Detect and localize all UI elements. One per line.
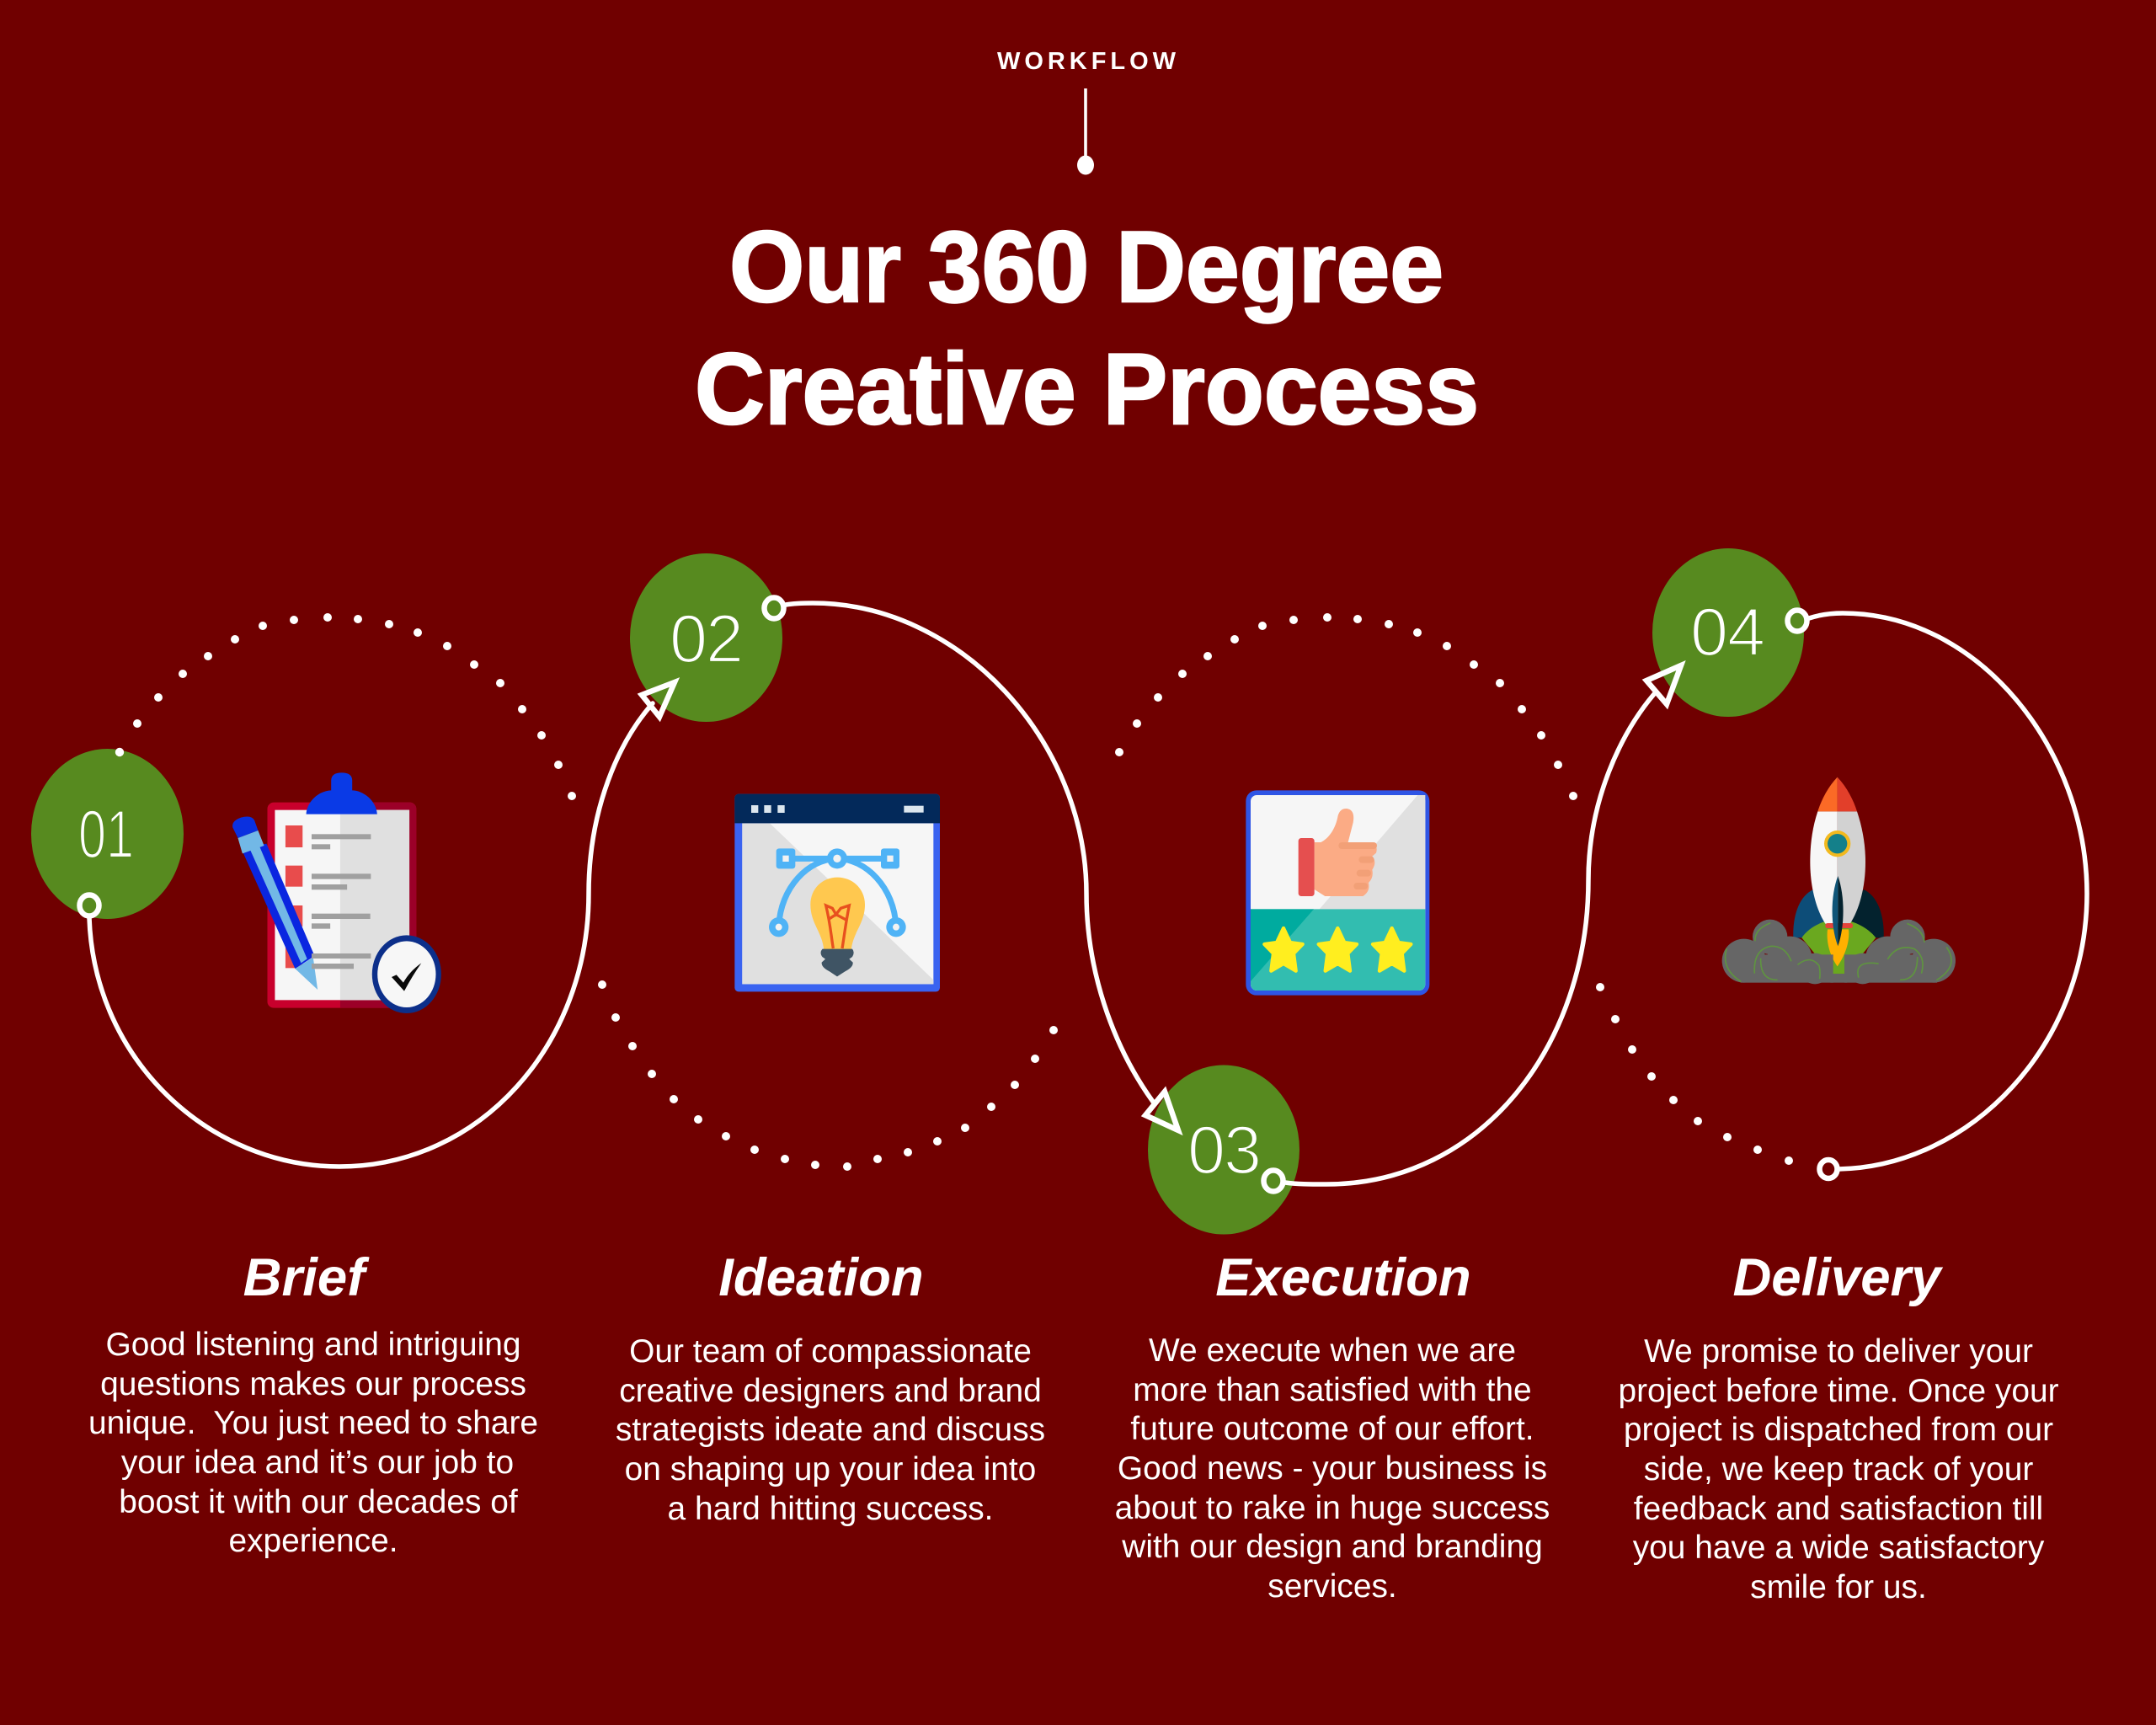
text block: Ideation — [616, 1333, 1045, 1527]
text block: Delivery: project is dispatched from our — [1624, 1412, 2053, 1448]
text block: Execution: about to rake in huge success — [1115, 1490, 1550, 1526]
text block: Ideation: a hard hitting success. — [668, 1491, 993, 1527]
text block: Delivery: feedback and satisfaction till — [1634, 1491, 2043, 1527]
text block: Brief: experience. — [228, 1523, 398, 1559]
title connector line with dot — [1077, 88, 1094, 175]
icon: thumbs up with three stars — [1246, 790, 1429, 996]
eyebrow label: WORKFLOW: WORKFLOW — [997, 48, 1177, 75]
dotted arc: bottom, step 04 — [1596, 983, 1793, 1165]
text block: Brief: your idea and it’s our job to — [121, 1445, 514, 1481]
curve with arrow: step 03 to 04 — [1263, 665, 1681, 1191]
text block: Execution: future outcome of our effort. — [1130, 1411, 1534, 1447]
dotted arc: top, step 01 — [115, 613, 576, 800]
text block: Brief: unique. You just need to share — [88, 1405, 538, 1441]
step badge 04: 04 — [1690, 595, 1765, 670]
text block: Delivery — [1618, 1333, 2059, 1605]
step badge 02 — [630, 553, 782, 722]
step badge 02: 02 — [670, 601, 744, 677]
title: Our 360 Degree — [729, 211, 1444, 323]
icon: rocket launching from smoke — [1722, 777, 1956, 984]
text block: Delivery: smile for us. — [1750, 1569, 1927, 1605]
heading: Ideation: Ideation — [718, 1248, 924, 1307]
step badge 01 — [31, 749, 184, 919]
step badge 01: 01 — [78, 797, 134, 873]
dotted arc: bottom, step 02 — [598, 980, 1058, 1171]
heading: Delivery: Delivery — [1732, 1248, 1943, 1307]
text block: Ideation: on shaping up your idea into — [625, 1451, 1036, 1487]
text block: Execution: We execute when we are — [1149, 1332, 1516, 1369]
text block: Execution: with our design and branding — [1121, 1529, 1543, 1565]
text block: Brief — [88, 1327, 538, 1559]
heading: Brief: Brief — [243, 1248, 370, 1307]
text block: Delivery: project before time. Once your — [1618, 1373, 2059, 1409]
step badge 03 — [1148, 1065, 1299, 1235]
heading: Execution: Execution — [1215, 1248, 1471, 1307]
text block: Ideation: Our team of compassionate — [629, 1333, 1032, 1370]
text block: Brief: questions makes our process — [100, 1366, 526, 1402]
icon: browser window with bulb and bezier curve — [734, 794, 940, 991]
text block: Brief: Good listening and intriguing — [106, 1327, 520, 1363]
curve with arrow: step 01 to 02 — [79, 682, 675, 1167]
text block: Execution — [1115, 1332, 1550, 1605]
text block: Ideation: creative designers and brand — [619, 1373, 1042, 1409]
text block: Delivery: you have a wide satisfactory — [1633, 1530, 2045, 1566]
title — [695, 211, 1479, 446]
icon: clipboard with pencil and check badge — [232, 772, 441, 1013]
text block: Brief: boost it with our decades of — [119, 1484, 518, 1520]
text block: Ideation: strategists ideate and discuss — [616, 1412, 1045, 1448]
text block: Execution: Good news - your business is — [1118, 1450, 1547, 1487]
title: Creative Process — [695, 333, 1479, 446]
curve with arrow: step 02 to 03 — [765, 598, 1178, 1130]
curve: step 04 to end marker — [1787, 610, 2087, 1178]
step badge 03: 03 — [1187, 1113, 1262, 1188]
dotted arc: top, step 03 — [1115, 613, 1577, 800]
text block: Delivery: We promise to deliver your — [1644, 1333, 2033, 1370]
step badge 04 — [1652, 548, 1804, 717]
text block: Execution: more than satisfied with the — [1133, 1372, 1532, 1408]
text block: Execution: services. — [1267, 1568, 1397, 1605]
text block: Delivery: side, we keep track of your — [1644, 1451, 2033, 1487]
